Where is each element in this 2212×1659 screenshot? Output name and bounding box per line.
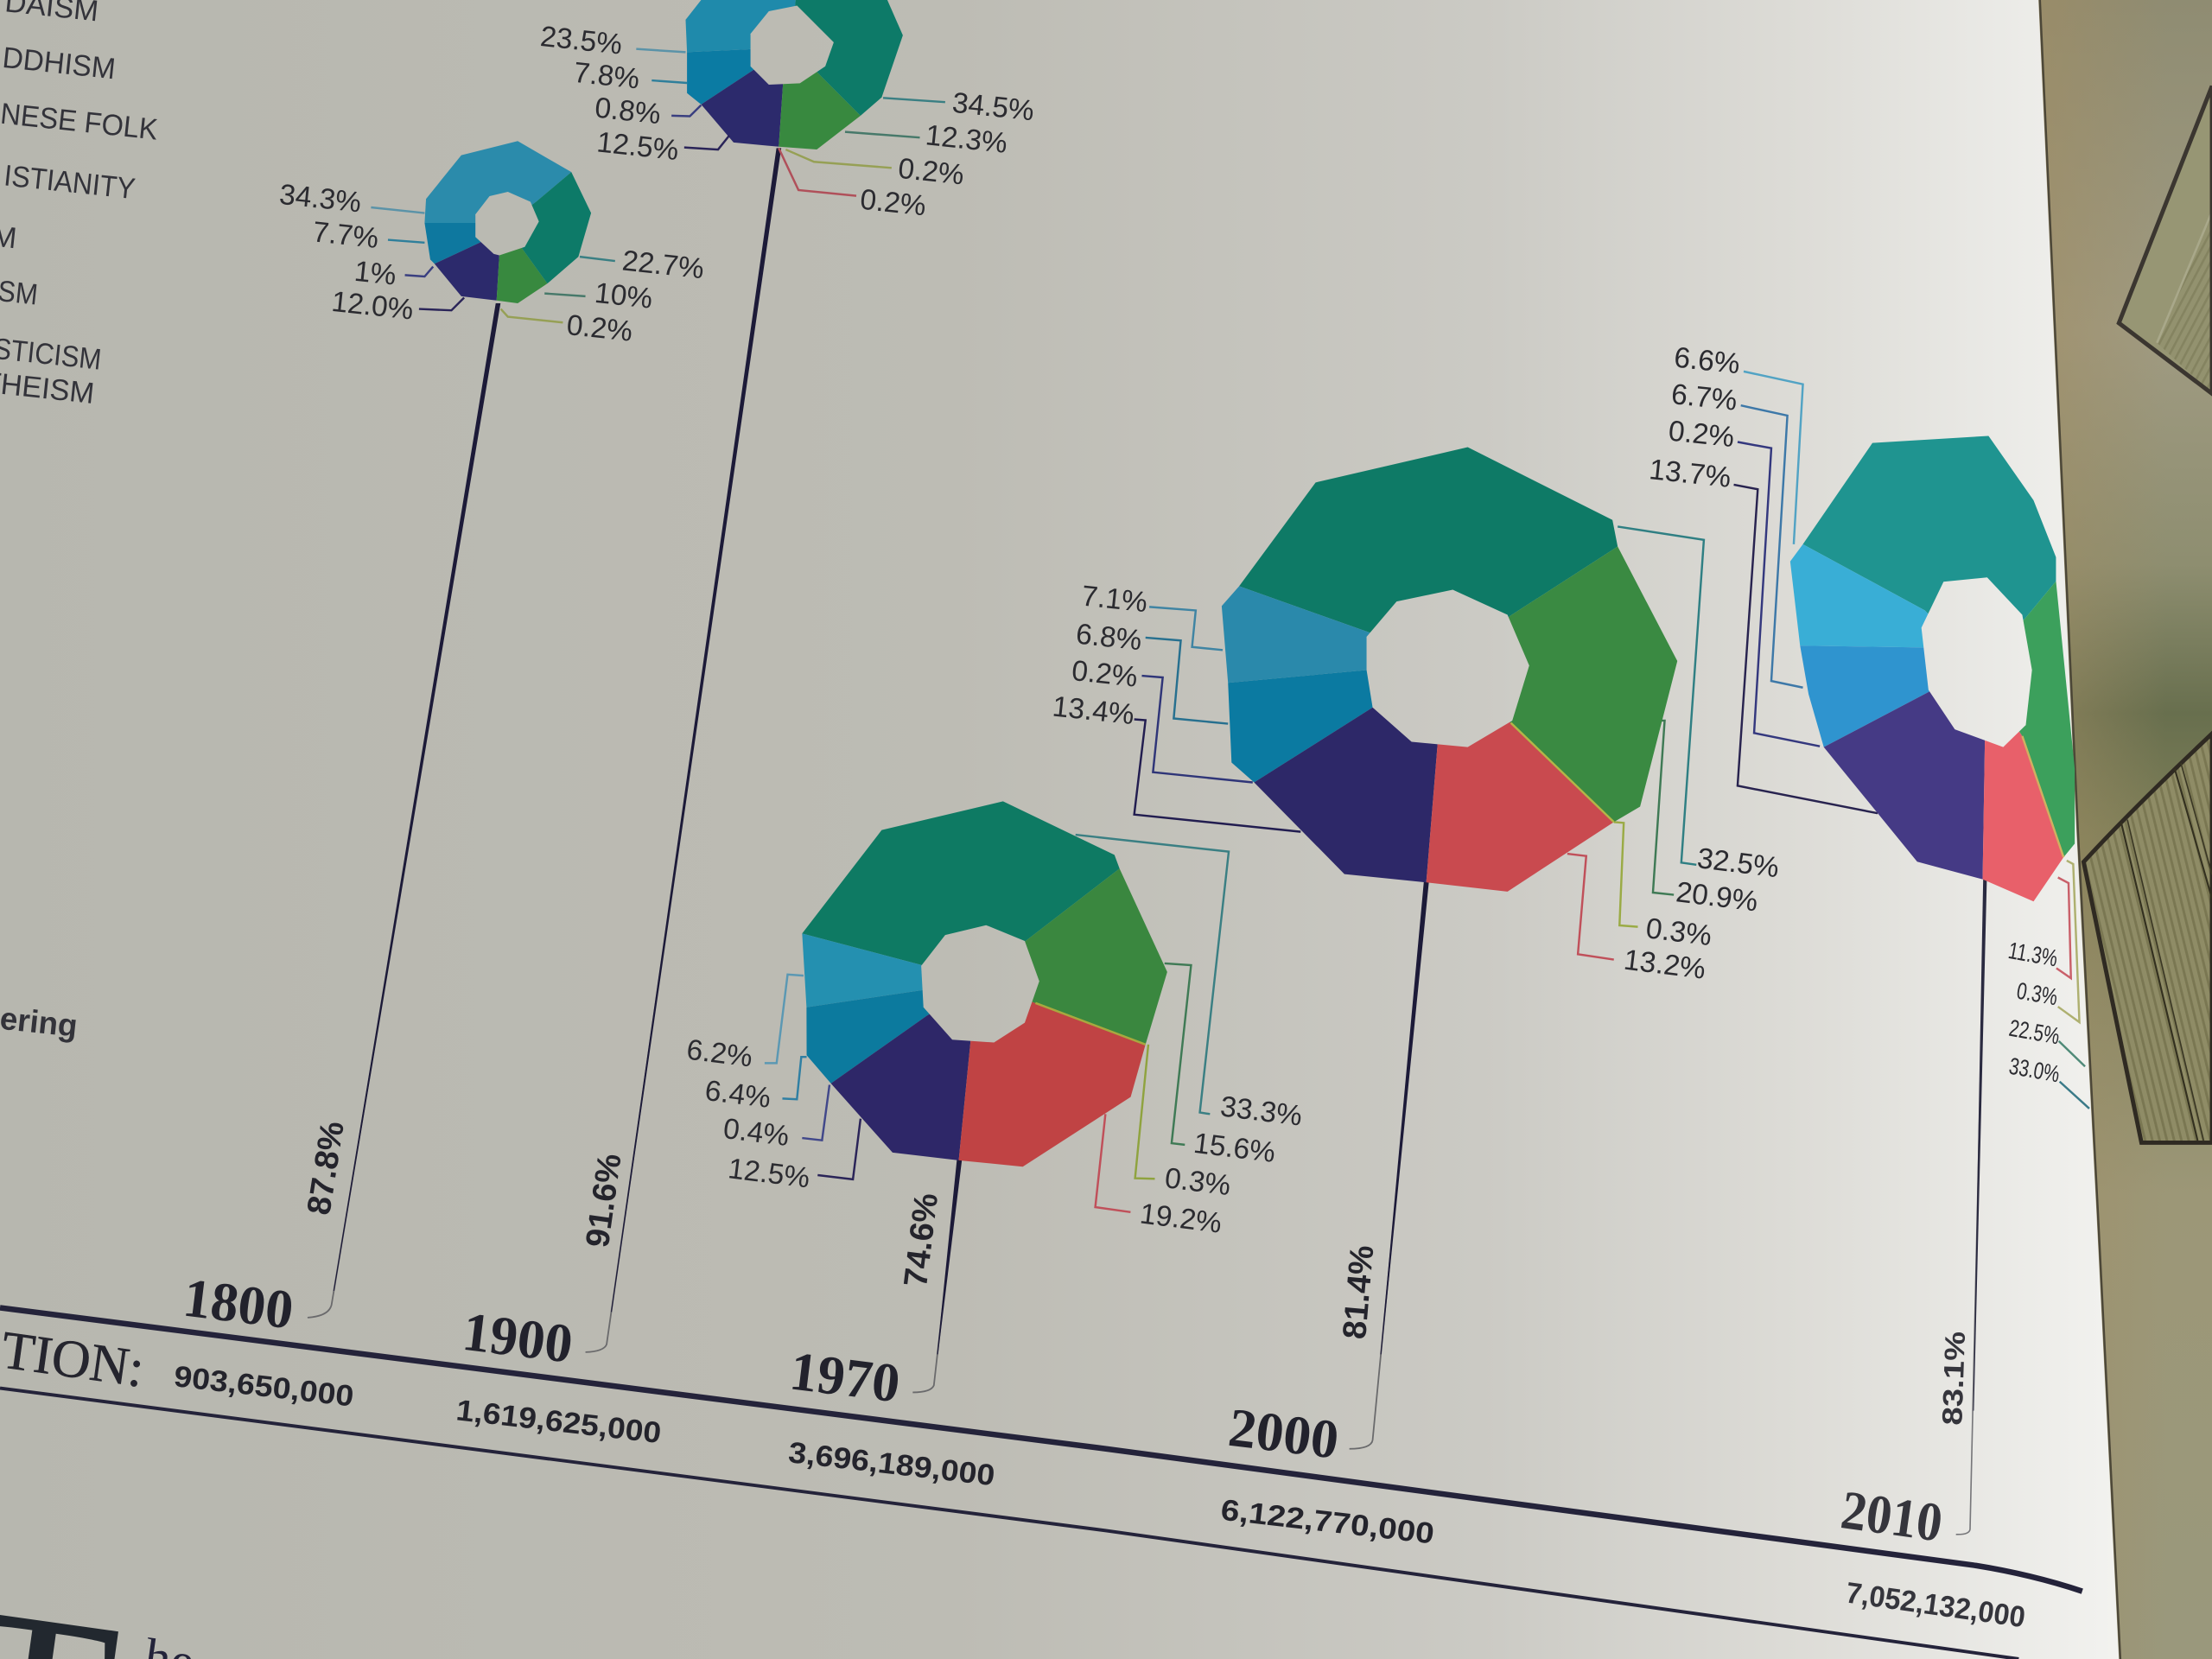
1800 population: 903,650,000 (172, 1360, 355, 1414)
clipped body text start (0, 1551, 198, 1659)
1800 leaders (371, 207, 615, 322)
1900 stem (586, 148, 781, 1352)
2010 share: 83.1% (1936, 1331, 1971, 1426)
page edge shadow (2040, 0, 2120, 1659)
2000 year: 2000 (1225, 1396, 1342, 1471)
1900 population: 1,619,625,000 (454, 1394, 663, 1450)
legend: clipped religion labels: DDHISM (1, 41, 117, 86)
2010 left values: 6.6% (1673, 342, 1741, 380)
2010 segments (1790, 435, 2075, 901)
2010 leaders (1734, 372, 1878, 813)
1800 values: 22.7% (620, 245, 705, 285)
next page: lower striped shape (2083, 734, 2212, 1142)
2000 stem (1350, 881, 1429, 1449)
1900 values: 34.5% (950, 87, 1035, 127)
2000 values: 13.2% (1622, 944, 1707, 986)
1900 values: 7.8% (572, 57, 641, 96)
1800 values: 0.2% (565, 309, 634, 348)
2010 left values (1648, 342, 1741, 494)
1800 values: 7.7% (311, 216, 380, 255)
1800 values: 1% (353, 256, 397, 292)
2010 left values: 6.7% (1669, 378, 1738, 417)
1970 share: 74.6% (897, 1191, 945, 1289)
1800 share: 87.8% (300, 1119, 352, 1217)
1970 values: 0.4% (721, 1113, 791, 1153)
2000 values: 7.1% (1080, 580, 1149, 619)
2010 right values: 11.3% (2006, 938, 2059, 972)
1800 segments (424, 141, 591, 303)
2000 share: 81.4% (1336, 1243, 1381, 1341)
2010 left values: 0.2% (1667, 415, 1736, 454)
legend: clipped religion labels: ISTIANITY (3, 159, 137, 206)
1900 values: 0.2% (897, 153, 965, 192)
2000 segments (1222, 448, 1677, 892)
2000 values (1051, 580, 1781, 986)
1900 values: 0.2% (859, 184, 927, 222)
1970 values: 15.6% (1192, 1128, 1277, 1169)
legend: clipped bold label: ering (0, 1001, 79, 1044)
2000 values: 32.5% (1695, 842, 1781, 884)
2000 population: 6,122,770,000 (1219, 1494, 1436, 1551)
1970 values: 6.2% (685, 1034, 754, 1074)
2000 values: 0.2% (1071, 655, 1139, 694)
2010 right values: 22.5% (2007, 1015, 2062, 1050)
chart: 1900 donut (454, 0, 1035, 1450)
1970 stem (912, 1160, 962, 1392)
chart: 1970 donut (685, 801, 1304, 1492)
2000 leaders (1135, 526, 1704, 960)
1970 year: 1970 (786, 1339, 903, 1414)
2000 values: 6.8% (1074, 619, 1143, 657)
1800 values (278, 179, 705, 348)
1800 values: 10% (593, 277, 654, 315)
1800 values: 12.0% (330, 286, 415, 327)
population band: heading: TION: (0, 1320, 148, 1399)
2000 values: 20.9% (1675, 876, 1759, 918)
1900 year: 1900 (460, 1300, 576, 1375)
1970 values: 0.3% (1163, 1162, 1232, 1202)
legend: clipped religion labels: NESE FOLK (0, 98, 159, 147)
1900 share: 91.6% (579, 1152, 629, 1249)
1900 values: 23.5% (539, 21, 624, 61)
population band: upper rule (0, 1307, 2082, 1592)
1800 year: 1800 (180, 1267, 296, 1341)
chart: 1800 donut (172, 141, 705, 1414)
1900 values: 0.8% (594, 92, 662, 130)
1970 leaders (765, 835, 1229, 1212)
chart: 2000 donut (1051, 448, 1781, 1551)
legend: clipped religion labels (0, 0, 159, 410)
2010 population: 7,052,132,000 (1844, 1577, 2027, 1634)
1900 segments (685, 0, 903, 149)
next page: upper striped shape (2119, 86, 2212, 394)
1970 values (685, 1034, 1304, 1240)
1970 values: 12.5% (726, 1153, 811, 1195)
1800 stem (308, 303, 500, 1318)
2000 values: 13.4% (1051, 691, 1135, 731)
1970 values: 6.4% (703, 1075, 772, 1115)
1900 leaders (636, 49, 945, 196)
2010 right values: 0.3% (2015, 978, 2059, 1011)
2000 values: 0.3% (1644, 912, 1713, 952)
2010 right leaders (2056, 861, 2089, 1109)
2010 right values (2006, 938, 2062, 1088)
1800 values: 34.3% (278, 179, 363, 219)
1970 population: 3,696,189,000 (786, 1436, 996, 1492)
1970 values: 19.2% (1138, 1198, 1224, 1240)
2010 year: 2010 (1837, 1479, 1946, 1554)
1970 values: 33.3% (1218, 1090, 1304, 1133)
2010 stem (1956, 879, 1986, 1535)
1900 values: 12.5% (595, 126, 680, 167)
population band: lower rule (0, 1389, 2018, 1659)
1900 values: 12.3% (924, 119, 1008, 160)
2010 left values: 13.7% (1648, 454, 1732, 494)
chart: 2010 donut (1648, 342, 2089, 1634)
2010 right values: 33.0% (2007, 1053, 2062, 1088)
1900 values (539, 21, 1035, 222)
1970 segments (802, 801, 1167, 1166)
